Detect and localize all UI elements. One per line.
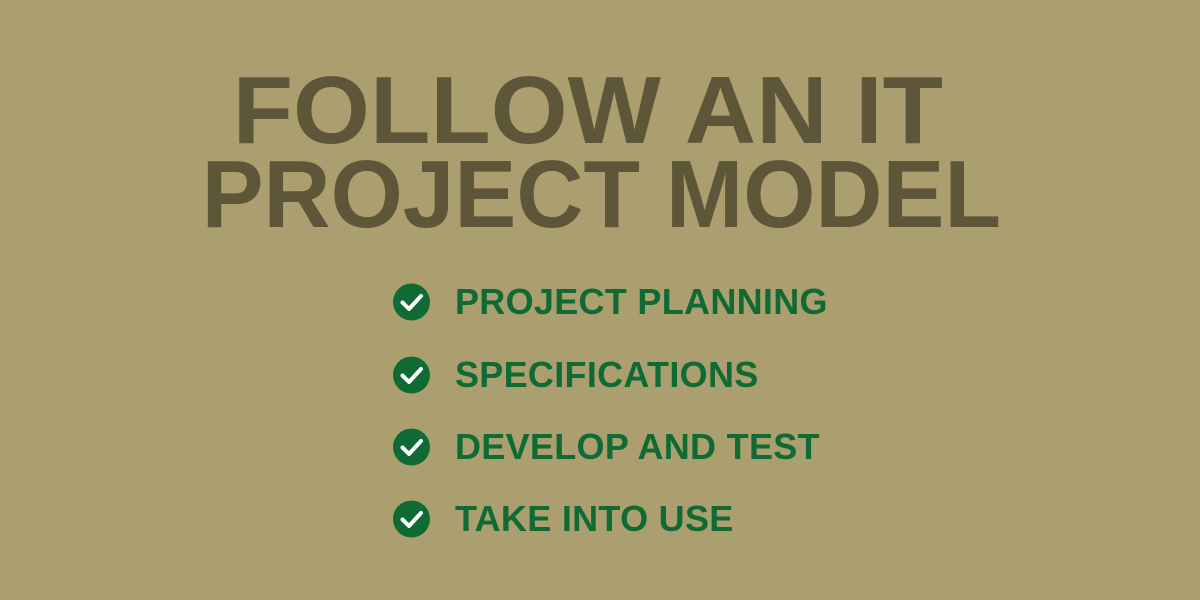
item: project planning: PROJECT PLANNING [455, 281, 828, 322]
checklist [393, 281, 828, 539]
item: take into use: TAKE INTO USE [455, 498, 734, 539]
title: FOLLOW AN IT [233, 57, 943, 164]
item: develop and test: DEVELOP AND TEST [455, 426, 820, 467]
title: PROJECT MODEL [201, 141, 1001, 248]
title [201, 57, 1001, 248]
item: specifications: SPECIFICATIONS [455, 354, 759, 395]
